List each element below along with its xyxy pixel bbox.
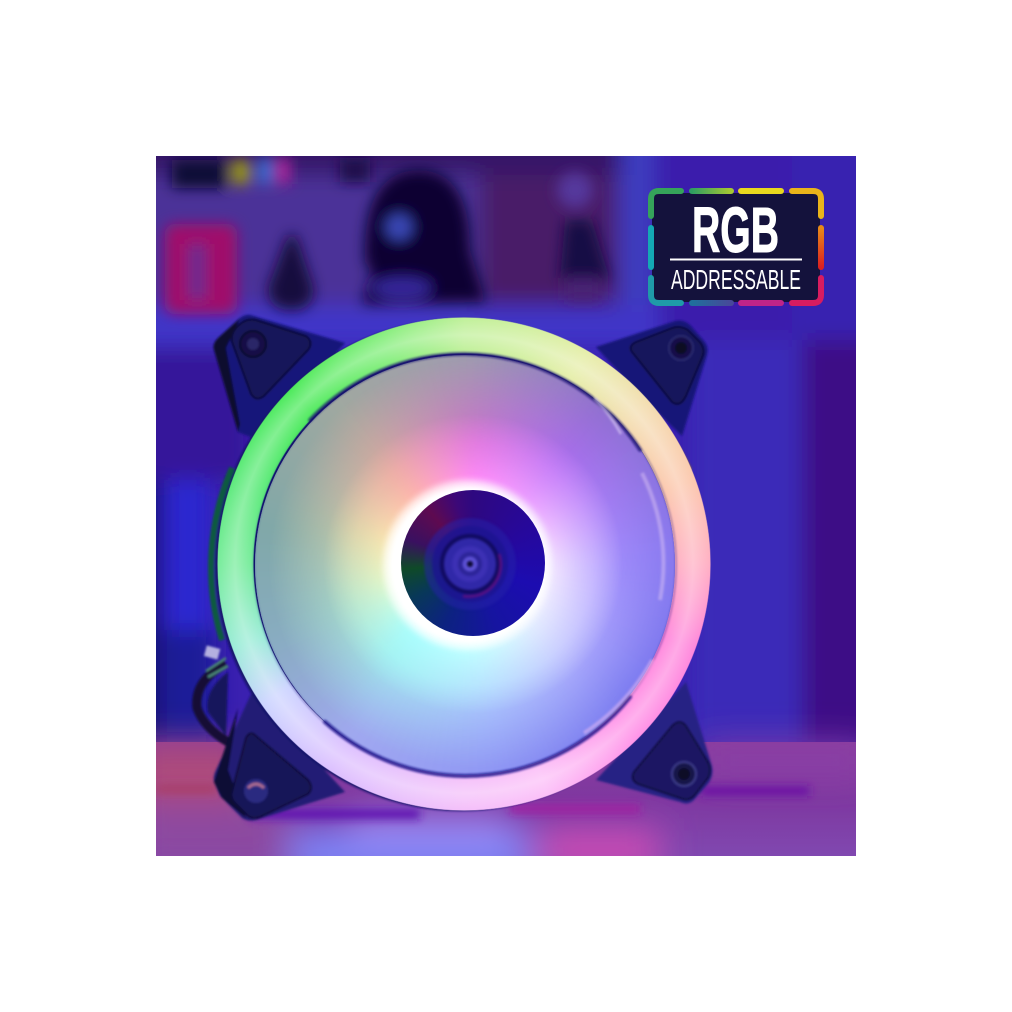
fan shadow on table [156,785,810,819]
badge divider [670,258,802,260]
blurred shelf room background [156,156,856,856]
table surface [156,742,856,856]
cable loop [197,645,228,742]
ring hot centre glow [217,317,711,811]
fan outer housing rim [211,319,707,811]
near hub colour wash [332,423,616,704]
hub white halo [378,475,558,655]
badge RGB text: RGB [692,194,779,266]
fan blade disc glow [255,355,675,775]
fan hub [401,490,545,636]
fan frame with corner mounts and cable [191,314,714,822]
badge rainbow border [651,191,821,303]
mount: top-right [596,321,708,436]
mount: bottom-left [214,692,345,821]
mount: bottom-right [596,682,712,804]
outer blade colour wash [153,244,793,884]
badge: RGB addressable [648,188,824,306]
lit outer RGB ring [217,317,711,811]
glass reflections and inner ring edge [252,350,678,780]
mount: top-left [214,315,345,440]
mid blade colour wash [280,375,658,756]
photo panel: blurred room background with fan [156,156,856,856]
badge dark plate [652,193,820,302]
hub concentric rings [422,518,516,610]
